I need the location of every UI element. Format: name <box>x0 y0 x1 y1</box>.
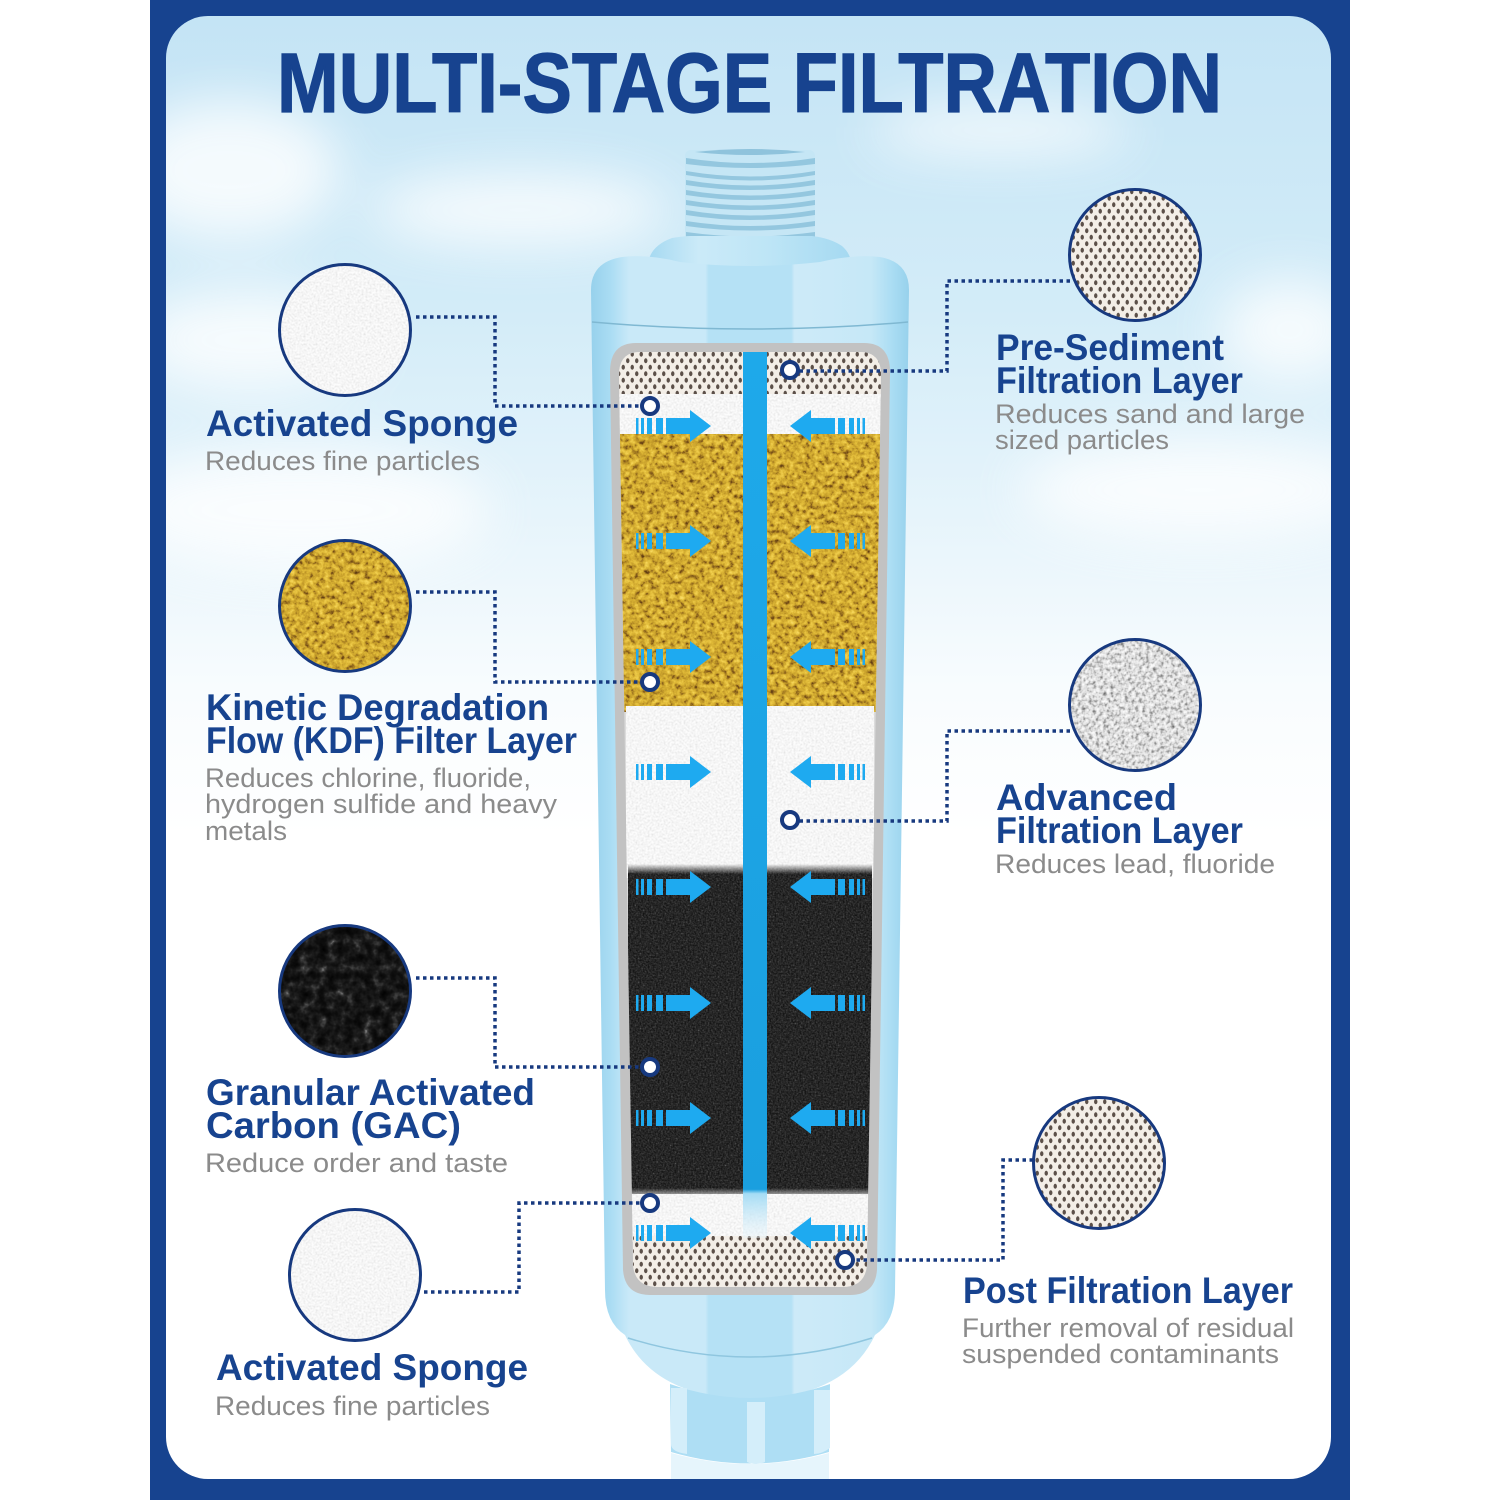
connector <box>416 978 642 1067</box>
filter cartridge illustration <box>591 149 909 1479</box>
description: metals <box>205 816 287 846</box>
description: Further removal of residual <box>962 1313 1294 1343</box>
heading <box>206 1072 535 1146</box>
pin <box>642 1195 658 1211</box>
description <box>962 1313 1294 1369</box>
heading: Filtration Layer <box>996 360 1243 401</box>
heading <box>996 327 1243 401</box>
callout: activated sponge bottom <box>215 1195 658 1421</box>
filter media layers <box>610 352 890 1292</box>
connector <box>853 1160 1033 1260</box>
heading: Filtration Layer <box>996 810 1243 851</box>
heading: Kinetic Degradation <box>206 687 549 728</box>
description: Reduces fine particles <box>205 446 480 476</box>
bottom connector <box>670 1384 830 1479</box>
threaded top connector <box>685 149 815 242</box>
callout: KDF <box>205 540 658 846</box>
icon: sponge swatch <box>279 264 411 396</box>
connector <box>416 317 642 406</box>
icon: mesh swatch <box>1070 190 1200 320</box>
description: suspended contaminants <box>962 1339 1279 1369</box>
layer: post filtration mesh <box>633 1236 867 1288</box>
callout: post filtration <box>837 1098 1294 1369</box>
description: Reduces sand and large <box>995 399 1305 429</box>
title: MULTI-STAGE FILTRATION <box>277 36 1222 130</box>
connector <box>798 281 1070 371</box>
heading: Post Filtration Layer <box>963 1270 1293 1311</box>
heading: Activated Sponge <box>206 403 518 444</box>
pin <box>837 1252 853 1268</box>
layer: KDF gold <box>620 434 880 712</box>
layer: activated sponge bottom <box>630 1194 870 1242</box>
flow arrows <box>636 410 865 1249</box>
connector <box>798 731 1070 821</box>
pin <box>642 674 658 690</box>
icon: mesh swatch <box>1034 1098 1164 1228</box>
pin <box>782 812 798 828</box>
layer: pre-sediment mesh <box>616 352 884 398</box>
icon: KDF swatch <box>279 540 411 672</box>
callout: pre-sediment <box>782 190 1305 455</box>
shoulder cap <box>648 236 851 268</box>
heading: Activated Sponge <box>216 1347 528 1388</box>
connector <box>424 1203 642 1292</box>
description: Reduces chlorine, fluoride, <box>205 763 531 793</box>
inner cutaway housing <box>610 343 890 1295</box>
description: Reduce order and taste <box>205 1148 508 1178</box>
description: sized particles <box>995 425 1169 455</box>
callout: activated sponge top <box>205 264 658 476</box>
blue frame <box>150 0 1350 1500</box>
callout: GAC <box>205 925 658 1178</box>
layer: activated sponge top <box>619 394 881 434</box>
description: hydrogen sulfide and heavy <box>205 789 558 819</box>
cartridge body <box>591 256 909 1400</box>
pin <box>782 362 798 378</box>
heading <box>206 687 577 761</box>
callout: advanced filtration <box>782 639 1275 879</box>
heading: Granular Activated <box>206 1072 535 1113</box>
description: Reduces lead, fluoride <box>995 849 1275 879</box>
icon: sponge swatch <box>289 1209 421 1341</box>
icon: carbon swatch <box>279 925 411 1057</box>
description <box>995 399 1305 455</box>
layer: carbon <box>628 864 872 1198</box>
heading: Carbon (GAC) <box>206 1105 461 1146</box>
heading: Advanced <box>996 777 1177 818</box>
icon: advanced swatch <box>1069 639 1201 771</box>
description: Reduces fine particles <box>215 1391 490 1421</box>
heading <box>996 777 1243 851</box>
central tube <box>743 352 767 1238</box>
connector <box>416 592 642 682</box>
description <box>205 763 558 846</box>
pin <box>642 398 658 414</box>
heading: Flow (KDF) Filter Layer <box>206 720 577 761</box>
pin <box>642 1059 658 1075</box>
heading: Pre-Sediment <box>996 327 1224 368</box>
layer: advanced filtration <box>626 706 874 878</box>
